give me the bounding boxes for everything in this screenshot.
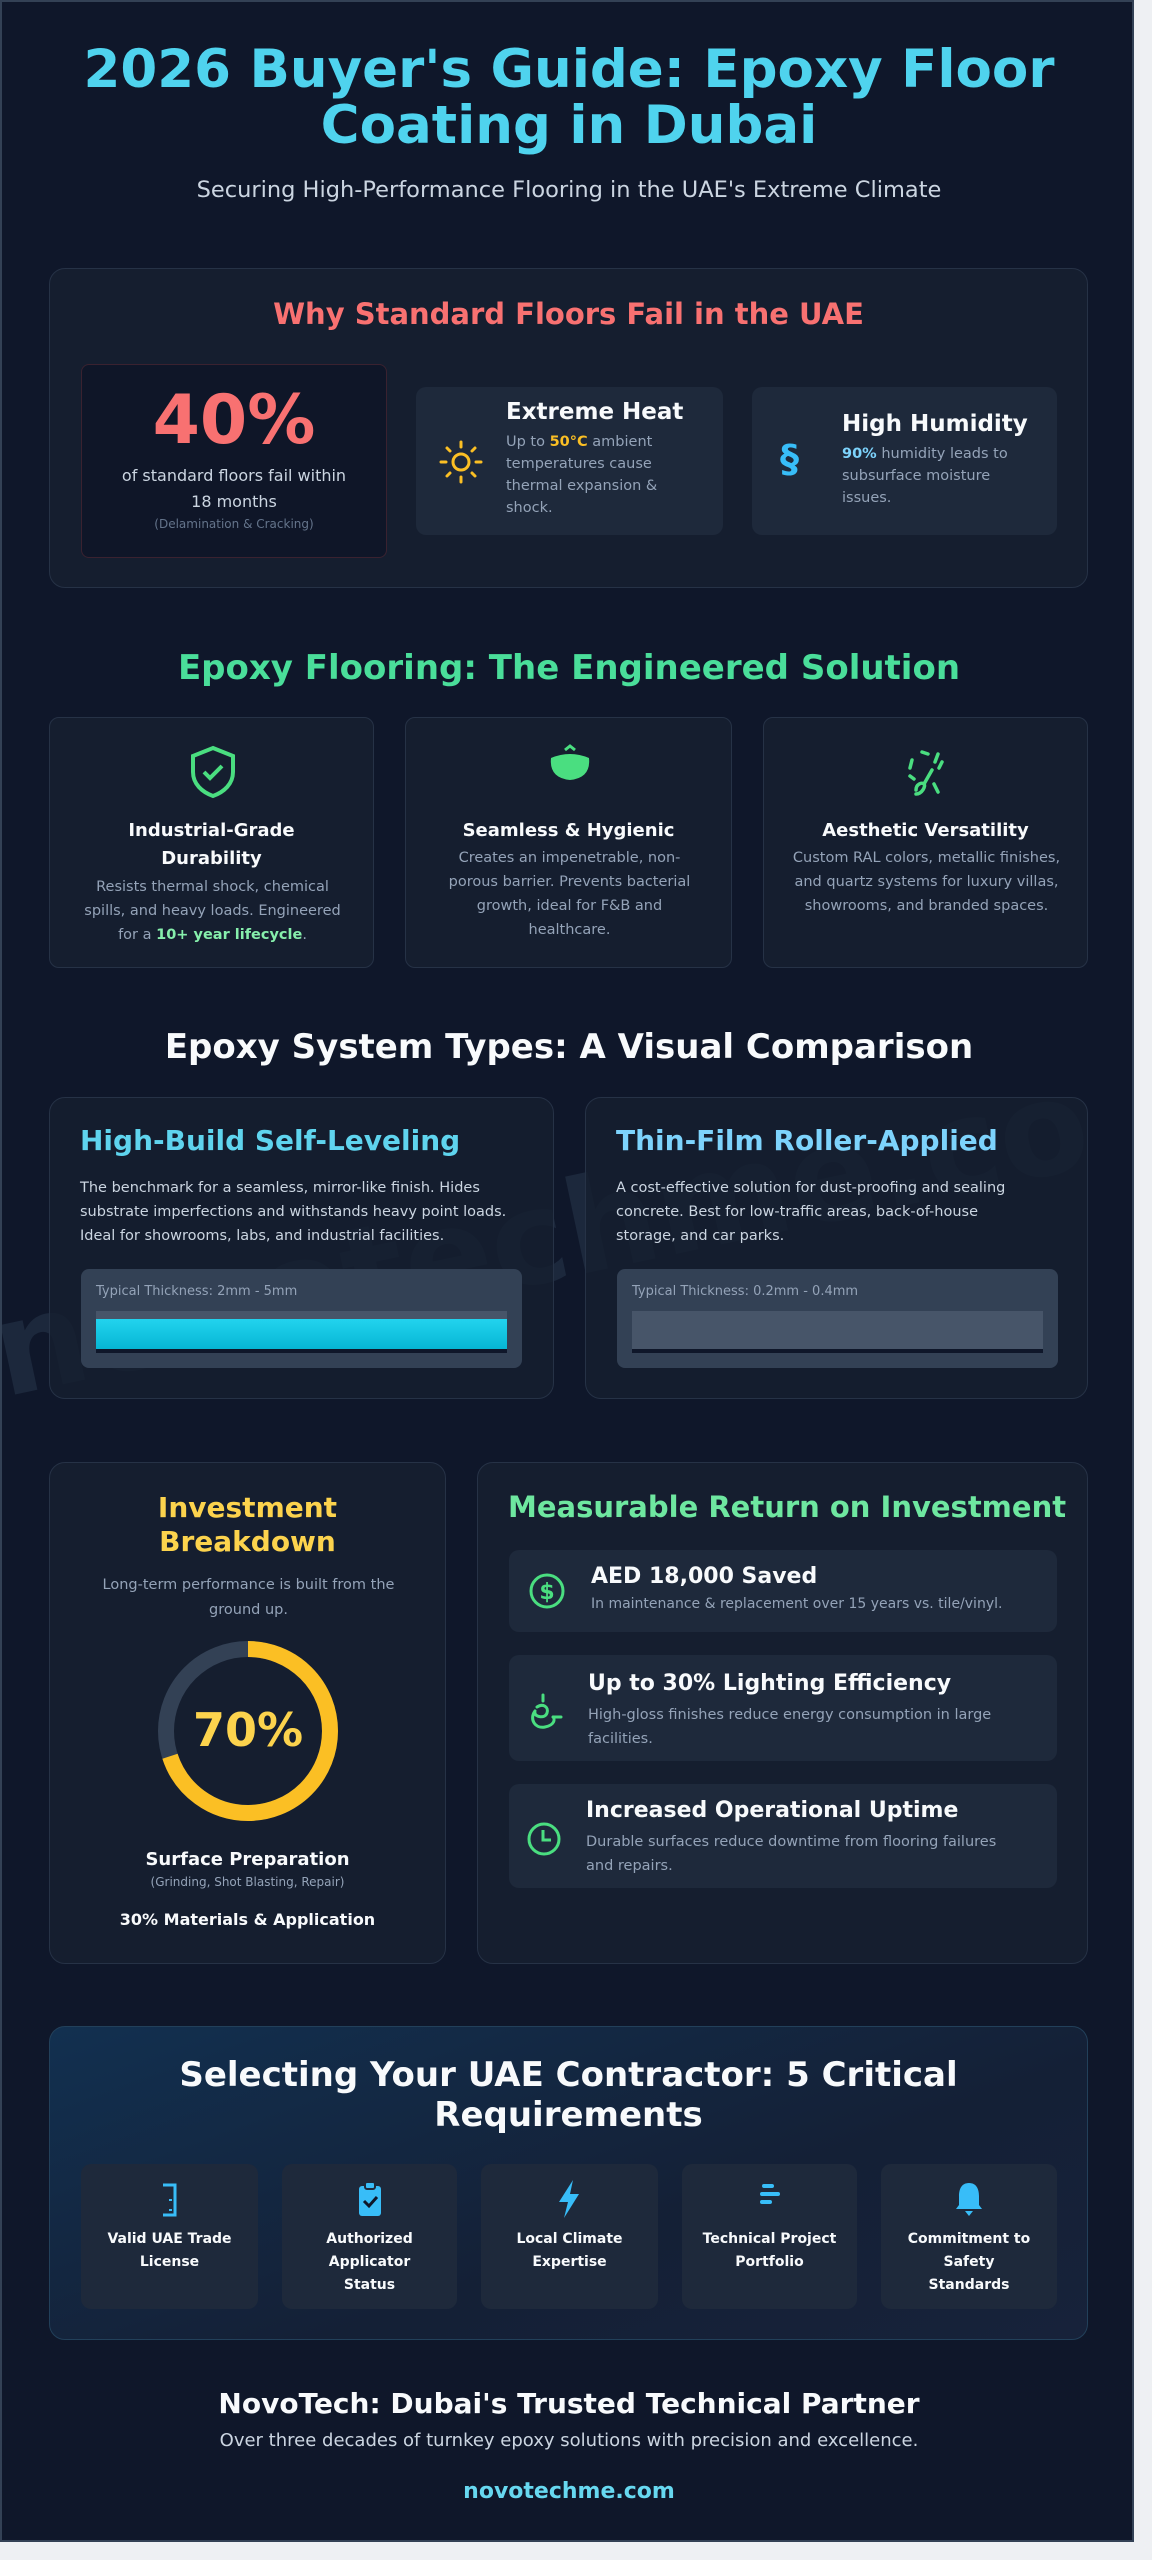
req: climate: Expertise [532, 2254, 607, 2270]
stat: 40% [81, 364, 387, 558]
card: durability: Durability [161, 848, 262, 869]
roi item: saved: AED 18,000 Saved [591, 1564, 817, 1589]
roi item: saved [509, 1550, 1057, 1632]
card: aesthetic [763, 717, 1088, 968]
panel: investment breakdown: Surface Preparation [145, 1849, 350, 1870]
roi item: uptime: Durable surfaces reduce downtime from flooring failures and repairs. [586, 1834, 996, 1874]
panel: investment breakdown: Long-term performance is built from the ground up. [103, 1577, 394, 1618]
req: portfolio: Portfolio [735, 2254, 804, 2270]
panel: ROI: Measurable Return on Investment [508, 1490, 1066, 1524]
req: climate: Local Climate [516, 2231, 623, 2247]
title [84, 39, 1054, 156]
footer: heading: NovoTech: Dubai's Trusted Technical Partner [218, 2387, 920, 2420]
card: high humidity [752, 387, 1057, 535]
panel: thin-film: A cost-effective solution for dust-proofing and sealing concrete. Best for low-traffic areas, back-of-house storage, and car parks. [616, 1180, 1005, 1244]
stat: 40%: of standard floors fail within [122, 466, 346, 485]
panel: investment breakdown [49, 1462, 446, 1964]
heading: solution: Epoxy Flooring: The Engineered Solution [178, 648, 960, 688]
roi item: uptime: Increased Operational Uptime [586, 1798, 958, 1823]
roi item: saved: In maintenance & replacement over 15 years vs. tile/vinyl. [591, 1596, 1002, 1612]
icon: brush [908, 750, 944, 796]
req: safety: Standards [929, 2277, 1009, 2293]
panel: thin-film [585, 1097, 1088, 1399]
card: durability [49, 717, 374, 968]
roi item: lighting: Up to 30% Lighting Efficiency [588, 1671, 951, 1696]
stat: 40%: 18 months [191, 492, 277, 511]
thickness bar: 0.2-0.4mm: Typical Thickness: 0.2mm - 0.4mm [632, 1284, 858, 1299]
roi item: lighting: High-gloss finishes reduce energy consumption in large facilities. [588, 1707, 991, 1747]
panel: contractor requirements: Selecting Your UAE Contractor: 5 Critical [179, 2055, 958, 2095]
req: trade license: License [140, 2254, 199, 2270]
icon: moisture: § [780, 437, 799, 481]
donut chart: 70% [158, 1641, 338, 1821]
card: aesthetic: Custom RAL colors, metallic finishes, and quartz systems for luxury villas, showrooms, and branded spaces. [793, 850, 1060, 914]
panel: high-build [49, 1097, 554, 1399]
card: extreme heat: Up to 50°C ambient temperatures cause thermal expansion & shock. [506, 434, 657, 516]
req: applicator: Status [344, 2277, 395, 2293]
donut chart: 70%: 70% [193, 1703, 303, 1757]
stat: 40%: 40% [153, 381, 315, 460]
icon: shield [191, 746, 235, 798]
card: durability: Industrial-Grade [128, 820, 295, 841]
req: portfolio [682, 2164, 857, 2309]
panel: investment breakdown: 30% Materials & Application [120, 1910, 375, 1929]
req: safety [881, 2164, 1057, 2309]
card: extreme heat: Extreme Heat [506, 399, 683, 425]
thickness bar: 2-5mm: Typical Thickness: 2mm - 5mm [96, 1284, 297, 1299]
req: portfolio: Technical Project [703, 2231, 836, 2247]
req: climate [481, 2164, 658, 2309]
icon: seamless [550, 744, 590, 780]
card: hygienic: Seamless & Hygienic [463, 820, 674, 841]
req: trade license [81, 2164, 258, 2309]
req: safety: Safety [944, 2254, 994, 2270]
panel: why floors fail [49, 268, 1088, 588]
card: durability: Resists thermal shock, chemical spills, and heavy loads. Engineered for a 10+ year lifecycle. [84, 879, 341, 943]
card: extreme heat [416, 387, 723, 535]
roi item: uptime [509, 1784, 1057, 1888]
subtitle: Securing High-Performance Flooring in the UAE's Extreme Climate [197, 177, 941, 203]
footer: tagline: Over three decades of turnkey epoxy solutions with precision and excellence. [220, 2430, 918, 2451]
panel: investment breakdown: Breakdown [159, 1525, 336, 1558]
panel: ROI [477, 1462, 1088, 1964]
title: Coating in Dubai [321, 95, 817, 156]
roi item: lighting [509, 1655, 1057, 1761]
panel: high-build: The benchmark for a seamless, mirror-like finish. Hides substrate imperfections and withstands heavy point loads. Ideal for showrooms, labs, and industrial facilities. [80, 1180, 506, 1244]
req: safety: Commitment to [908, 2231, 1030, 2247]
card: aesthetic: Aesthetic Versatility [822, 820, 1029, 841]
watermark: novotechme.co [0, 1047, 1102, 1427]
card: hygienic: Creates an impenetrable, non-porous barrier. Prevents bacterial growth, ideal for F&B and healthcare. [449, 850, 690, 938]
card: high humidity: 90% humidity leads to subsurface moisture issues. [842, 446, 1008, 506]
req: trade license: Valid UAE Trade [107, 2231, 232, 2247]
heading: why fail: Why Standard Floors Fail in the UAE [273, 297, 864, 331]
icon: sun [440, 440, 482, 484]
stat: 40%: (Delamination & Cracking) [154, 517, 314, 531]
thickness bar: 2-5mm [81, 1269, 522, 1368]
footer: website link: novotechme.com [463, 2479, 675, 2504]
req: applicator: Applicator [329, 2254, 410, 2270]
heading: system types: Epoxy System Types: A Visual Comparison [165, 1027, 973, 1067]
panel: investment breakdown: Investment [158, 1491, 337, 1524]
thickness bar: 0.2-0.4mm [617, 1269, 1058, 1368]
card: high humidity: High Humidity [842, 411, 1028, 437]
panel: contractor requirements [49, 2026, 1088, 2340]
roi item: saved: $ [539, 1580, 555, 1605]
card: hygienic [405, 717, 732, 968]
req: applicator: Authorized [326, 2231, 413, 2247]
title: 2026 Buyer's Guide: Epoxy Floor [84, 39, 1054, 100]
panel: high-build: High-Build Self-Leveling [80, 1124, 460, 1157]
panel: investment breakdown: (Grinding, Shot Blasting, Repair) [151, 1875, 344, 1889]
panel: contractor requirements: Requirements [434, 2095, 703, 2135]
panel: thin-film: Thin-Film Roller-Applied [616, 1124, 998, 1157]
req: applicator [282, 2164, 457, 2309]
